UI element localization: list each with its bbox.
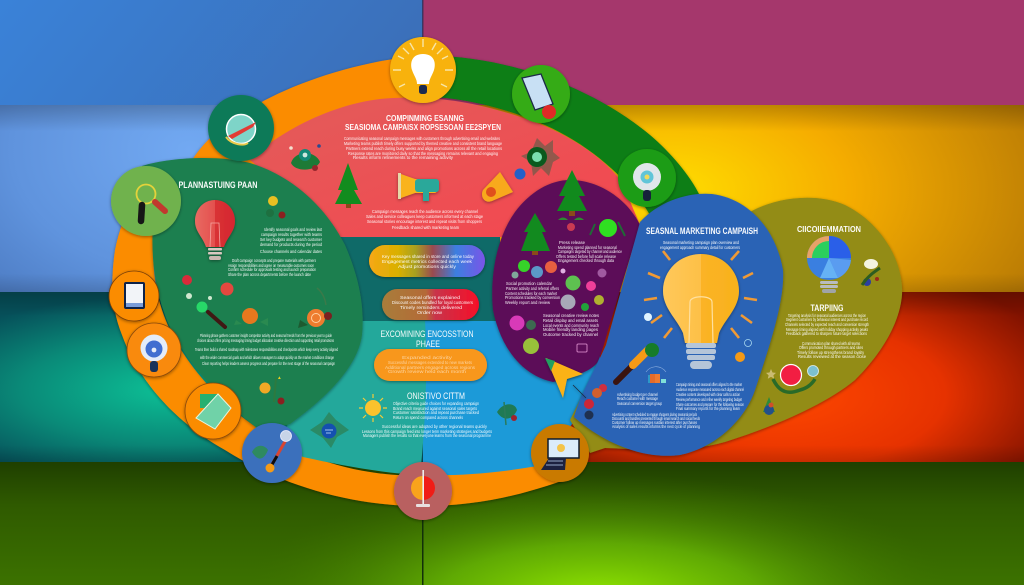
- text block: planning right: Identify seasonal goals and review last: [264, 227, 323, 232]
- text block: olive lower: Results reviewed at the season close: [798, 354, 867, 359]
- heading: targeting: TARPIING: [810, 303, 844, 314]
- text block: purple left: Weekly report and review: [505, 300, 551, 305]
- icon: tree upper: [557, 170, 587, 216]
- heading: red line one: COMPINMING ESANNG: [386, 114, 464, 123]
- text block: objectives lower: Lessons from this campaign feed into longer term marketing strategies and budgets: [362, 429, 493, 434]
- olive panel contents: [763, 224, 880, 415]
- text block: blue lower left: Advertising budget per channel: [617, 392, 658, 397]
- panel: seasonal marketing campaign (blue): [574, 194, 783, 456]
- icon circle: mauve signal: [394, 462, 452, 520]
- text block: purple lower: Retail display and email assets: [543, 318, 599, 323]
- text block: olive lower: Communication plan shared with all teams: [802, 341, 861, 346]
- text block: red top: [344, 136, 503, 160]
- text block: purple lower: Seasonal creative review notes: [543, 313, 600, 318]
- heading: objectives: ONISTIVO CITTM: [407, 391, 465, 401]
- text block: blue bottom: Customer follow up messages sustain interest after purchases: [612, 420, 698, 425]
- text block: red lower: Sales and service colleagues keep customers informed at each stage: [366, 214, 483, 219]
- icons: social bubbles: [512, 260, 606, 311]
- icon: orange dot with scope: [735, 340, 752, 362]
- heading: planning: PLANNASTUING PAAN: [178, 180, 258, 190]
- icon: megaphone: [398, 173, 439, 201]
- pill: rainbow gradient: Engagement metrics collected each week: [382, 259, 473, 264]
- purple panel: [492, 180, 640, 382]
- text block: blue right: Creative content developed with clear calls to action: [676, 392, 740, 397]
- icon circle: light bulb: [390, 37, 456, 103]
- text block: purple right: [556, 240, 622, 263]
- text block: planning middle: Share the plan across departments before the launch date: [228, 272, 311, 277]
- text block: objectives: [393, 401, 479, 420]
- text block: planning right: campaign results together with teams: [261, 232, 323, 237]
- text block: planning lower: [195, 333, 338, 366]
- text block: blue bottom: Advertising content scheduled to engage shoppers during seasonal periods: [612, 412, 697, 417]
- lower panel: blue section: [423, 320, 600, 475]
- text block: purple lower: [543, 313, 600, 337]
- text block: planning lower: Clear reporting helps leaders assess progress and prepare for the next stage of the seasonal campaign: [202, 361, 335, 366]
- text block: objectives: Brand reach measured against seasonal sales targets: [393, 406, 478, 411]
- icon circle: blue wand: [242, 423, 302, 483]
- pill: orange: Expanded activity: [402, 355, 453, 360]
- text block: purple lower: Local events and community reach: [543, 323, 599, 328]
- text block: objectives: Customer satisfaction and repeat purchase tracked: [393, 410, 479, 415]
- text block: red top: Partners extend reach during busy weeks and align promotions across all the retail locations: [346, 146, 503, 151]
- icon: green star with blue badge: [310, 412, 349, 448]
- orange ring arc: [112, 56, 575, 506]
- text block: blue right: Final summary reports for the planning team: [676, 406, 740, 411]
- text block: blue top: Seasonal marketing campaign plan overview and: [663, 240, 739, 245]
- text block: purple left: [505, 281, 560, 305]
- text block: planning right: [260, 227, 323, 254]
- text block: purple left: Social promotion calendar: [506, 281, 552, 286]
- text block: red top: Results inform refinements to the remaining activity: [353, 155, 454, 160]
- text block: red lower: Campaign messages reach the audience across every channel: [372, 209, 478, 214]
- icon circle: folded paper: [185, 383, 241, 439]
- icon: small bauble tree: [763, 397, 775, 415]
- text block: blue bottom: Analysis of sales results informs the next cycle of planning: [612, 424, 700, 429]
- icon: red light bulb: [195, 200, 235, 260]
- icon: sun: [359, 394, 387, 422]
- text block: red lower: [366, 209, 483, 230]
- text block: blue top: engagement approach summary detail for customers: [660, 245, 741, 250]
- icon: coloured badges: [584, 384, 607, 420]
- lower panel: teal section: [280, 320, 426, 475]
- text block: purple lower: Outcome tracked by channel: [543, 332, 598, 337]
- text block: blue right: [676, 382, 744, 411]
- heading: red line two: SEASIOMA CAMPAISX ROPSESOAN EE2SPYEN: [345, 122, 501, 132]
- text block: blue right: Audience response measured across each digital channel: [676, 387, 744, 392]
- icon circle: target bulb: [618, 149, 676, 207]
- text block: purple right: Engagement checked through data: [558, 258, 614, 263]
- text block: olive lower: Offers promoted through partners and sites: [799, 345, 864, 350]
- green ring arc: [423, 56, 700, 215]
- icon circle: tablet: [109, 271, 159, 321]
- text block: planning right: Set key budgets and research customer: [260, 237, 322, 242]
- icon: pie chart bulb: [807, 236, 851, 293]
- pill: orange: Successful messages extended to new markets: [388, 360, 473, 365]
- icon: small yellow bauble: [266, 196, 286, 218]
- icon: small screen: [577, 344, 587, 352]
- pill: orange: Growth review held each month: [388, 369, 467, 374]
- icon: large light bulb: [644, 251, 757, 369]
- text block: planning lower: with the wider commercial goals and which allows managers to adapt quickly as the market conditions change: [200, 355, 334, 360]
- text block: olive lower: Timely follow up strengthens brand loyalty: [797, 350, 865, 355]
- text block: blue bottom: Discounts and bundles presented through email search and social feeds: [612, 416, 700, 421]
- text block: planning right: demand for products during the period: [260, 242, 322, 247]
- text block: red top: Communicating seasonal campaign messages with customers through advertising email and websites: [344, 136, 501, 141]
- icons: pink and lime badges: [510, 316, 539, 354]
- text block: objectives lower: Successful ideas are adopted by other regional teams quickly: [382, 424, 488, 429]
- text block: blue top: [660, 240, 741, 250]
- text block: red lower: Feedback shared with marketing team: [392, 225, 459, 230]
- icons: planning holly baubles: [182, 275, 332, 328]
- middle panel: dark teal band: [335, 235, 500, 321]
- text block: purple right: Press release: [559, 240, 586, 245]
- pill: brown to red: Timely reminders delivered: [400, 305, 463, 310]
- icon: tree on red: [335, 163, 362, 208]
- icon: red target with holly: [766, 364, 818, 392]
- icon: holly on blue: [497, 402, 517, 425]
- icon: holly and baubles: [558, 218, 625, 237]
- text block: olive upper: Message timing aligned with holiday shopping activity peaks: [786, 327, 869, 332]
- pill: rainbow gradient: Key messages shared in store and online today: [382, 254, 475, 259]
- text block: olive lower: [797, 341, 867, 359]
- text block: red top: Marketing teams publish timely offers supported by themed creative and consistent brand language: [344, 141, 502, 146]
- icon: dark green starburst: [514, 138, 560, 180]
- text block: purple right: Marketing spend planned for seasonal: [558, 245, 617, 250]
- pill: brown to red: Seasonal offers explained: [400, 295, 461, 300]
- text block: purple left: Partner activity and referral offers: [506, 286, 560, 291]
- text block: planning lower: choices about offers pricing messaging timing budget allocation creative direction and supporting retail promotions: [197, 338, 334, 343]
- text block: purple left: Content schedules for each market: [505, 291, 558, 296]
- pill: orange: [374, 349, 487, 381]
- text block: blue right: Share outcomes and prepare for the following season: [676, 402, 744, 407]
- text block: objectives lower: Managers publish the results so that everyone learns from the seasonal programme: [363, 433, 491, 438]
- text block: olive upper: Segment customers by behaviour interest and purchase record: [786, 317, 868, 322]
- text block: blue lower left: [617, 392, 662, 406]
- text block: blue lower left: Reach customer with message: [617, 396, 658, 401]
- olive panel: [570, 198, 902, 453]
- text block: planning middle: Draft campaign concepts and prepare materials with partners: [232, 258, 317, 263]
- pill: orange: Additional partners engaged across regions: [385, 365, 476, 370]
- text block: objectives: Objective criteria guide choices for expanding campaign: [393, 401, 479, 406]
- pill: rainbow gradient: Adjust promotions quickly: [398, 264, 457, 269]
- text block: olive upper: Targeting analysis for seasonal audiences across the region: [788, 313, 866, 318]
- text block: purple left: Promotions tracked by conversion: [505, 295, 560, 300]
- icon: yellow bauble and plant: [260, 376, 284, 404]
- icon: star spark: [644, 313, 652, 321]
- pill: rainbow gradient: [369, 245, 485, 277]
- panel: red heading and content: [289, 114, 560, 230]
- heading: expansion phase: PHAEE: [416, 339, 440, 350]
- icon: small bar chart: [646, 367, 666, 383]
- purple panel contents: [505, 170, 625, 354]
- text block: planning lower: Planning phase gathers customer insight competitor activity and seasonal trends from the previous year to guide: [200, 333, 332, 338]
- text block: blue right: Campaign timing and seasonal offers aligned to the market: [676, 382, 742, 387]
- heading: seasonal marketing: SEASNAL MARKETING CAMPAISH: [646, 225, 758, 236]
- icon circle: magnifying glass: [111, 166, 181, 236]
- icon: small megaphone: [482, 172, 513, 202]
- text block: olive upper: Channels selected by expected reach and conversion strength: [785, 322, 869, 327]
- icon: cloud plant: [862, 259, 880, 286]
- text block: olive upper: [785, 313, 869, 336]
- icon circle: search lens: [127, 323, 181, 377]
- text block: blue right: Review performance and refine weekly targeting budget: [676, 397, 742, 402]
- text block: blue bottom: [612, 412, 700, 429]
- text block: planning middle: [228, 258, 317, 277]
- text block: red top: Response rates are monitored daily so that the messaging remains relevant and engaging: [348, 151, 498, 156]
- text block: planning middle: Confirm schedule for approvals testing and launch preparation: [228, 267, 316, 272]
- panel: planning (green): [142, 158, 363, 432]
- heading: expansion phase: [380, 329, 474, 350]
- icon circle: laptop: [531, 424, 589, 482]
- icon: yellow megaphone on blue: [545, 358, 586, 398]
- pill: brown to red: Order now: [417, 310, 443, 315]
- heading: communication: CIICOIIEMMATION: [797, 224, 861, 234]
- text block: red lower: Seasonal stories encourage interest and repeat visits from shoppers: [367, 219, 483, 224]
- pill: brown to red: Discount codes bundled for loyal customers: [392, 300, 474, 305]
- icon circle: phone: [512, 65, 570, 123]
- text block: purple right: Campaigns targeted by channel and audience: [558, 249, 622, 254]
- text block: blue lower left: Seasonal conversion target group: [617, 401, 662, 406]
- heading: expansion phase: EXCOMINING ENCOSSTION: [380, 329, 474, 340]
- text block: olive upper: Feedback gathered to sharpen future target selections: [786, 331, 868, 336]
- text block: planning right: Choose channels and calendar dates: [260, 249, 323, 254]
- red panel: [250, 98, 640, 237]
- text block: purple lower: Mobile friendly landing pages: [543, 327, 599, 332]
- icon: green magnifier: [196, 302, 225, 327]
- text block: purple right: Offers tested before full scale release: [556, 254, 616, 259]
- icon circle: compass ribbon: [208, 95, 274, 161]
- text block: planning middle: Assign responsibilities and agree on measurable outcomes soon: [228, 263, 314, 268]
- icon: torch: [616, 343, 659, 382]
- icon: tree lower: [521, 213, 550, 255]
- text block: objectives: Return on spend compared across channels: [393, 415, 464, 420]
- icon: holly cluster: [289, 144, 321, 171]
- pill: brown to red: [382, 289, 479, 320]
- text block: objectives lower: [362, 424, 493, 438]
- text block: planning lower: Teams then build a shared roadmap with milestones responsibilities and checkpoints which keep every activity aligned: [195, 347, 338, 352]
